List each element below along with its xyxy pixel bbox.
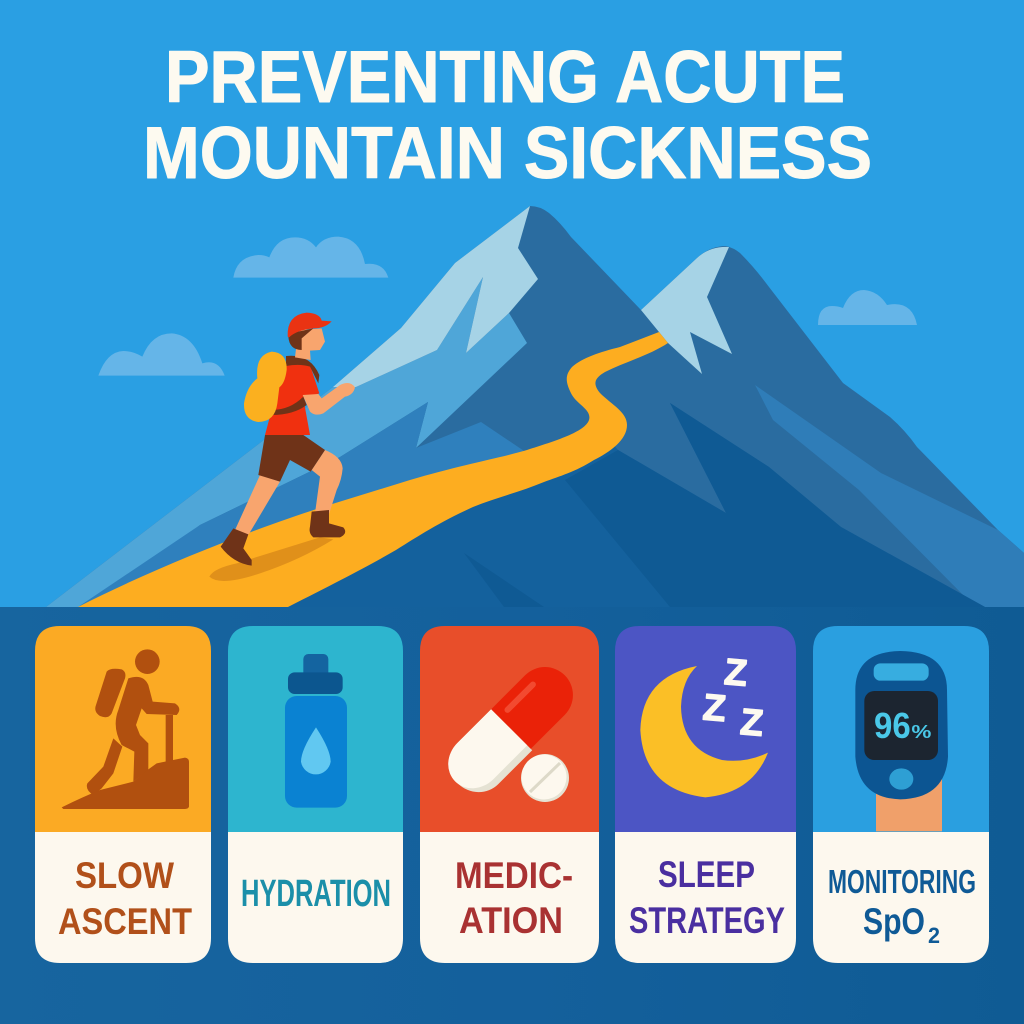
sky background — [0, 0, 1024, 610]
label: STRATEGY — [629, 900, 785, 941]
icon: pulse oximeter: 96 — [874, 705, 911, 746]
boots — [221, 510, 345, 566]
label: ASCENT — [58, 901, 192, 942]
yellow trail — [78, 332, 668, 607]
icon: tablet — [521, 754, 569, 802]
shadow — [209, 537, 333, 581]
cloud left — [98, 333, 225, 376]
label — [455, 855, 573, 941]
cloud top — [233, 237, 388, 278]
snow cap second — [641, 247, 732, 374]
clouds — [98, 237, 917, 376]
icon: hiker — [62, 649, 189, 809]
icon: capsule — [437, 655, 586, 804]
icon: pulse oximeter — [855, 651, 948, 831]
label: ATION — [459, 900, 563, 941]
shirt — [265, 363, 319, 435]
shorts — [258, 435, 325, 482]
card: hydration — [228, 626, 403, 963]
card: medication — [420, 626, 599, 963]
light slope — [46, 277, 527, 607]
cloud right — [818, 290, 917, 325]
mountains — [46, 206, 1024, 607]
label — [828, 863, 976, 948]
icon: moon and Zs — [640, 650, 768, 797]
cap — [288, 313, 332, 337]
snow cap main — [333, 206, 538, 387]
card: monitoring SpO2 — [813, 626, 989, 963]
deep shadows — [464, 403, 985, 607]
label: 2 — [928, 923, 940, 948]
title: PREVENTING ACUTE — [165, 37, 845, 118]
front leg — [312, 450, 343, 513]
label: SLEEP — [658, 854, 755, 895]
icon: pulse oximeter: % — [911, 721, 932, 742]
icon: water bottle — [285, 654, 347, 808]
title: MOUNTAIN SICKNESS — [143, 113, 872, 194]
icon: moon and Zs: Z — [723, 650, 749, 694]
neck and face — [295, 328, 325, 360]
title — [143, 37, 872, 194]
hiker — [209, 313, 355, 581]
label: SLOW — [75, 855, 174, 896]
arm — [303, 383, 355, 415]
straps — [272, 356, 319, 415]
card: sleep strategy — [615, 626, 796, 963]
label: HYDRATION — [241, 873, 391, 915]
card: slow ascent — [35, 626, 211, 963]
backpack — [244, 352, 287, 422]
icon: moon and Zs: Z — [739, 700, 765, 744]
mid slope — [78, 402, 530, 607]
bottom band — [0, 607, 1024, 1024]
icon: moon and Zs: Z — [701, 685, 728, 729]
label: MEDIC- — [455, 855, 573, 896]
rear leg — [235, 475, 280, 535]
right streak — [755, 385, 1024, 607]
label — [629, 854, 785, 941]
mountain silhouette — [46, 206, 1024, 607]
label: SpO — [863, 901, 925, 942]
deep base — [270, 403, 985, 607]
hair — [288, 328, 313, 350]
label — [58, 855, 192, 942]
